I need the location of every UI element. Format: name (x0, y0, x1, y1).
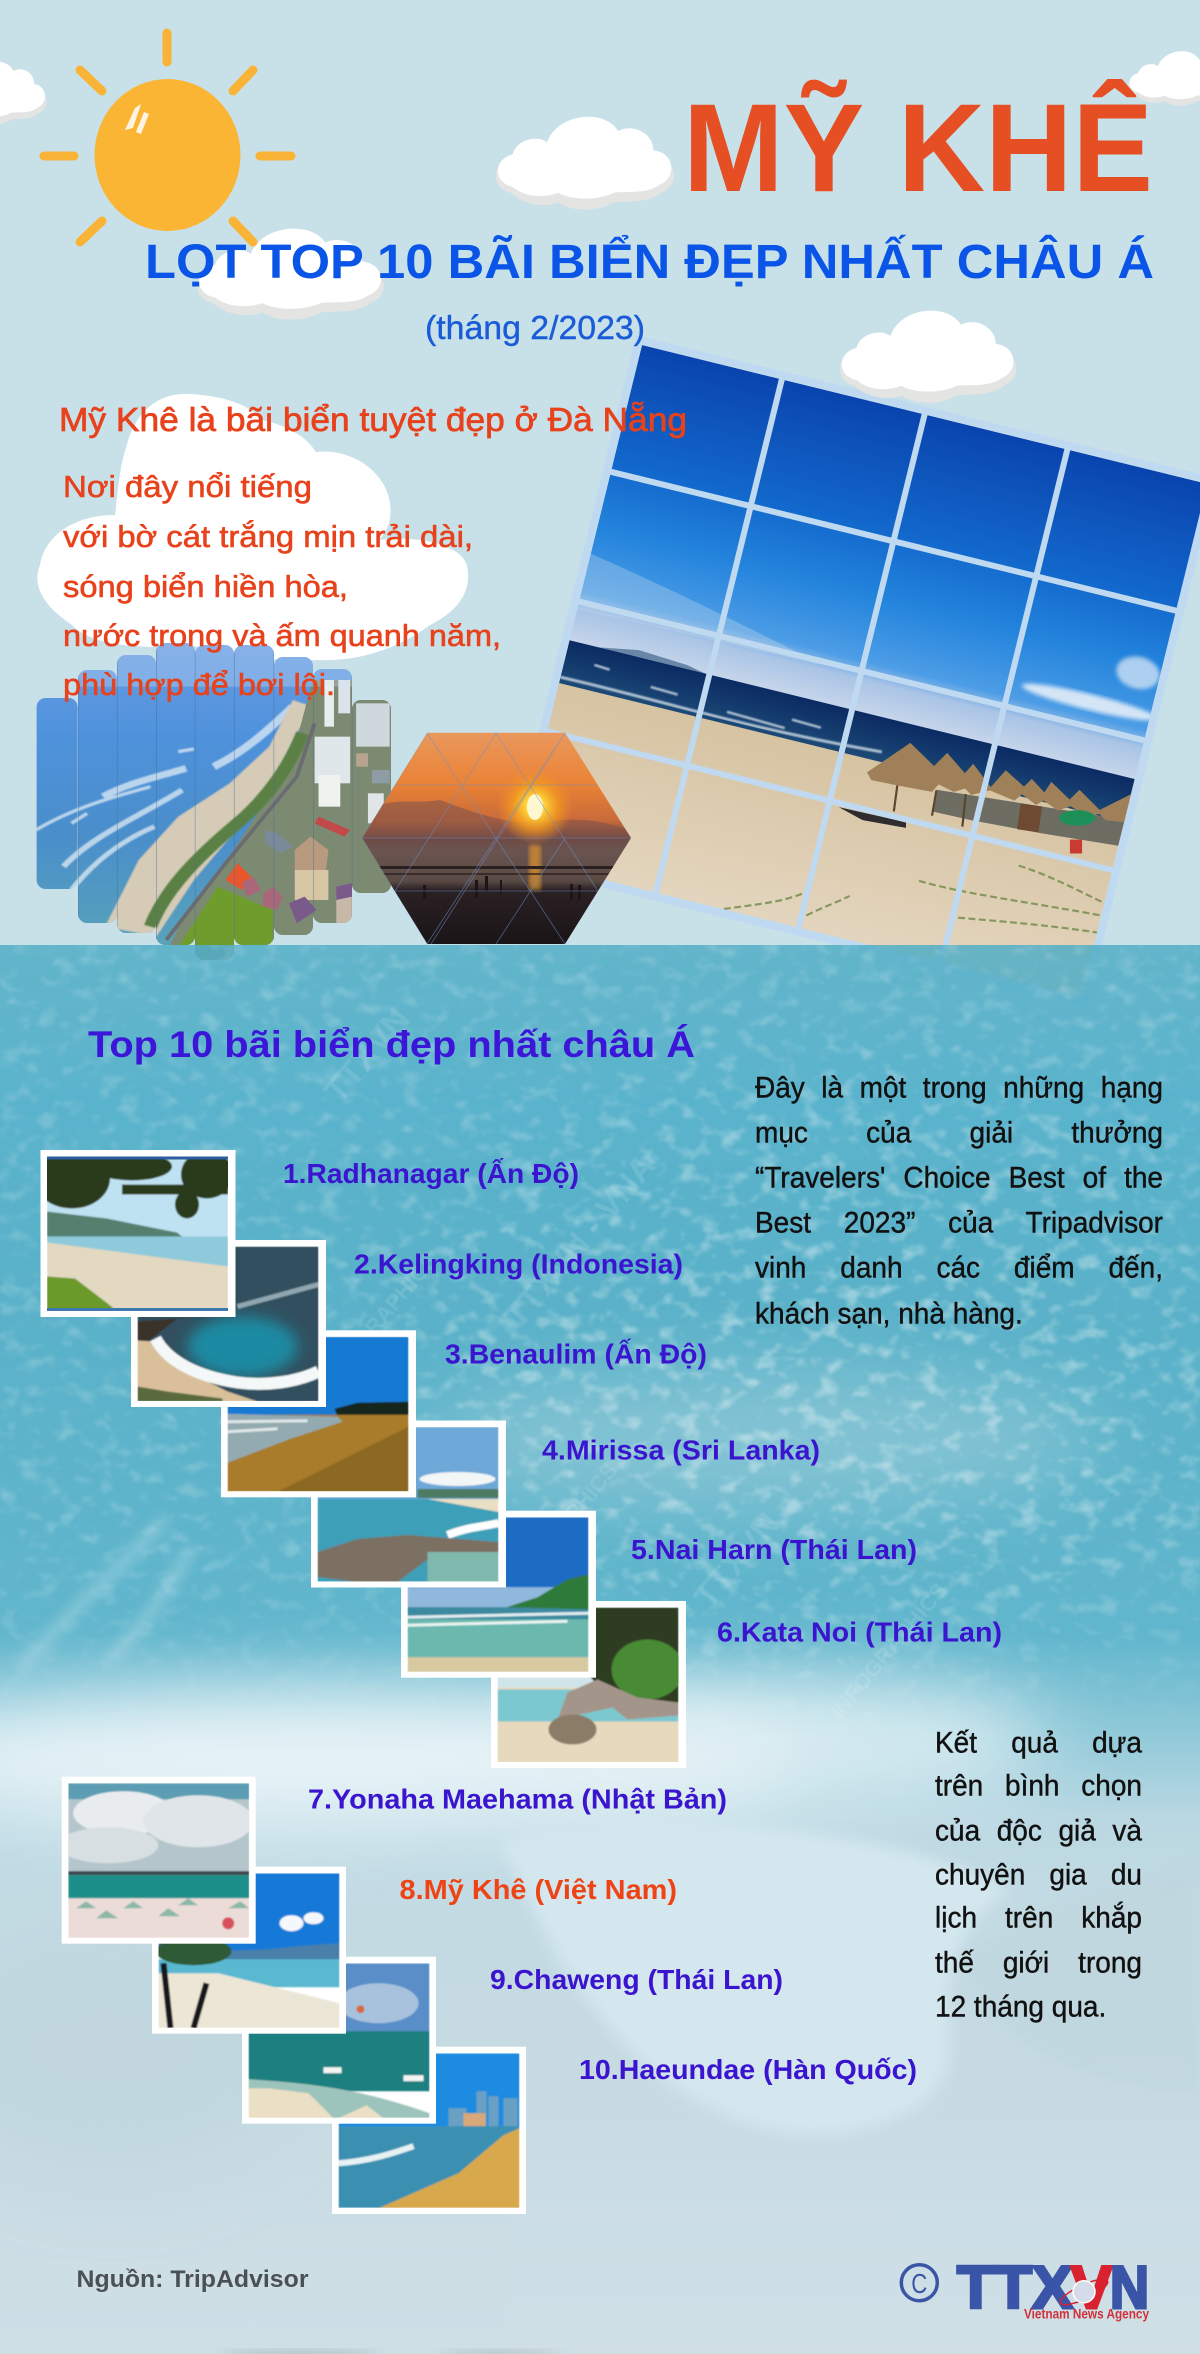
paragraph: award description: vinh danh các điểm đến, (755, 1251, 1163, 1284)
logo: TTXVN: N (1110, 2254, 1149, 2321)
thumbnail 3: Benaulim (221, 1330, 416, 1497)
thumbnail 8: My Khe (152, 1867, 346, 2034)
paragraph: award description (754, 1071, 1163, 1330)
cloud text background (37, 394, 468, 660)
ranking labels: 4.Mirissa (Sri Lanka) (542, 1434, 820, 1466)
subtitle: LỌT TOP 10 BÃI BIỂN ĐẸP NHẤT CHÂU Á (145, 234, 1154, 289)
sky background (0, 0, 1200, 945)
ranking labels: 6.Kata Noi (Thái Lan) (717, 1616, 1002, 1648)
thumbnail 9: Chaweng (242, 1957, 436, 2124)
thumbnail 10: Haeundae (332, 2047, 526, 2214)
title: MỸ KHÊ (683, 79, 1153, 218)
icon: cloud top right (1128, 51, 1200, 106)
paragraph: award description: Best 2023” của Tripadvisor (755, 1206, 1163, 1239)
icon: cloud behind subtitle (197, 229, 384, 320)
paragraph: award description: khách sạn, nhà hàng. (755, 1297, 1023, 1330)
thumbnail 1: Radhanagar (34, 1148, 236, 1317)
ranking labels (283, 1158, 1002, 2085)
logo: TTXVN: V (1071, 2254, 1112, 2321)
watermarks: TTXVN (687, 1505, 788, 1615)
icon: cloud above photo (840, 311, 1016, 403)
logo: TTXVN: Vietnam News Agency (1024, 2306, 1149, 2322)
icon: sun (44, 33, 291, 242)
thumbnail 2: Kelingking (131, 1240, 326, 1407)
ranking labels: 7.Yonaha Maehama (Nhật Bản) (308, 1784, 727, 1814)
section heading: Top 10 bãi biển đẹp nhất châu Á (88, 1024, 695, 1065)
watermarks: INFOGRAPHICS (825, 1578, 952, 1723)
logo: TTXVN: C (911, 2268, 927, 2299)
ranking labels: 3.Benaulim (Ấn Độ) (445, 1338, 707, 1370)
ranking labels: 9.Chaweng (Thái Lan) (490, 1964, 783, 1995)
paragraph: result basis (935, 1726, 1142, 2023)
sunset hexagon photo (360, 730, 635, 946)
paragraph: result basis: trên bình chọn (935, 1769, 1142, 1802)
watermarks: TTXVN (247, 1375, 348, 1485)
paragraph: award description: “Travelers' Choice Best of the (755, 1161, 1163, 1194)
date: (tháng 2/2023) (425, 309, 645, 346)
photo: rotated grid beach (539, 336, 1200, 945)
intro text: sóng biển hiền hòa, (63, 569, 348, 604)
ranking labels: 5.Nai Harn (Thái Lan) (631, 1534, 917, 1565)
paragraph: result basis: của độc giả và (935, 1814, 1142, 1847)
watermarks (247, 1000, 952, 1723)
thumbnail 5: Nai Harn (401, 1511, 596, 1678)
ocean section background (0, 945, 1200, 2168)
ranking labels: 8.Mỹ Khê (Việt Nam) (400, 1874, 677, 1905)
intro text: phù hợp để bơi lội. (63, 667, 335, 702)
source: Nguồn: TripAdvisor (76, 2266, 308, 2293)
paragraph: result basis: thế giới trong (935, 1946, 1142, 1979)
intro text (63, 469, 501, 702)
watermarks: INFOGRAPHICS (495, 1458, 622, 1603)
intro text: với bờ cát trắng mịn trải dài, (63, 519, 473, 554)
thumbnail 7: Yonaha (58, 1777, 256, 1944)
bottom blurred shapes (220, 2351, 560, 2354)
paragraph: award description: Đây là một trong những hạng (755, 1071, 1163, 1104)
watermarks: TTXVN (317, 1000, 418, 1110)
paragraph: result basis: Kết quả dựa (935, 1726, 1142, 1759)
icon: cloud top left (0, 61, 46, 124)
logo: TTXVN: TTX (957, 2254, 1073, 2321)
watermarks: TTXVN - VNA (497, 1147, 663, 1335)
icon: cloud behind title (496, 117, 674, 210)
intro text: Nơi đây nổi tiếng (63, 469, 312, 504)
thumbnail 6: Kata Noi (491, 1601, 686, 1768)
paragraph: award description: mục của giải thưởng (755, 1116, 1163, 1149)
aerial photo strips (36, 643, 391, 960)
logo: TTXVN (901, 2254, 1149, 2322)
paragraph: result basis: chuyên gia du (935, 1858, 1142, 1891)
ranking labels: 10.Haeundae (Hàn Quốc) (579, 2054, 917, 2085)
paragraph: result basis: 12 tháng qua. (935, 1990, 1106, 2023)
ranking labels: 2.Kelingking (Indonesia) (354, 1248, 683, 1280)
watermarks: INFOGRAPHICS (315, 1248, 442, 1393)
paragraph: result basis: lịch trên khắp (935, 1901, 1142, 1934)
ranking labels: 1.Radhanagar (Ấn Độ) (283, 1158, 579, 1189)
intro heading: Mỹ Khê là bãi biển tuyệt đẹp ở Đà Nẵng (59, 401, 687, 438)
intro text: nước trong và ấm quanh năm, (63, 618, 501, 653)
thumbnail 4: Mirissa (311, 1420, 506, 1588)
